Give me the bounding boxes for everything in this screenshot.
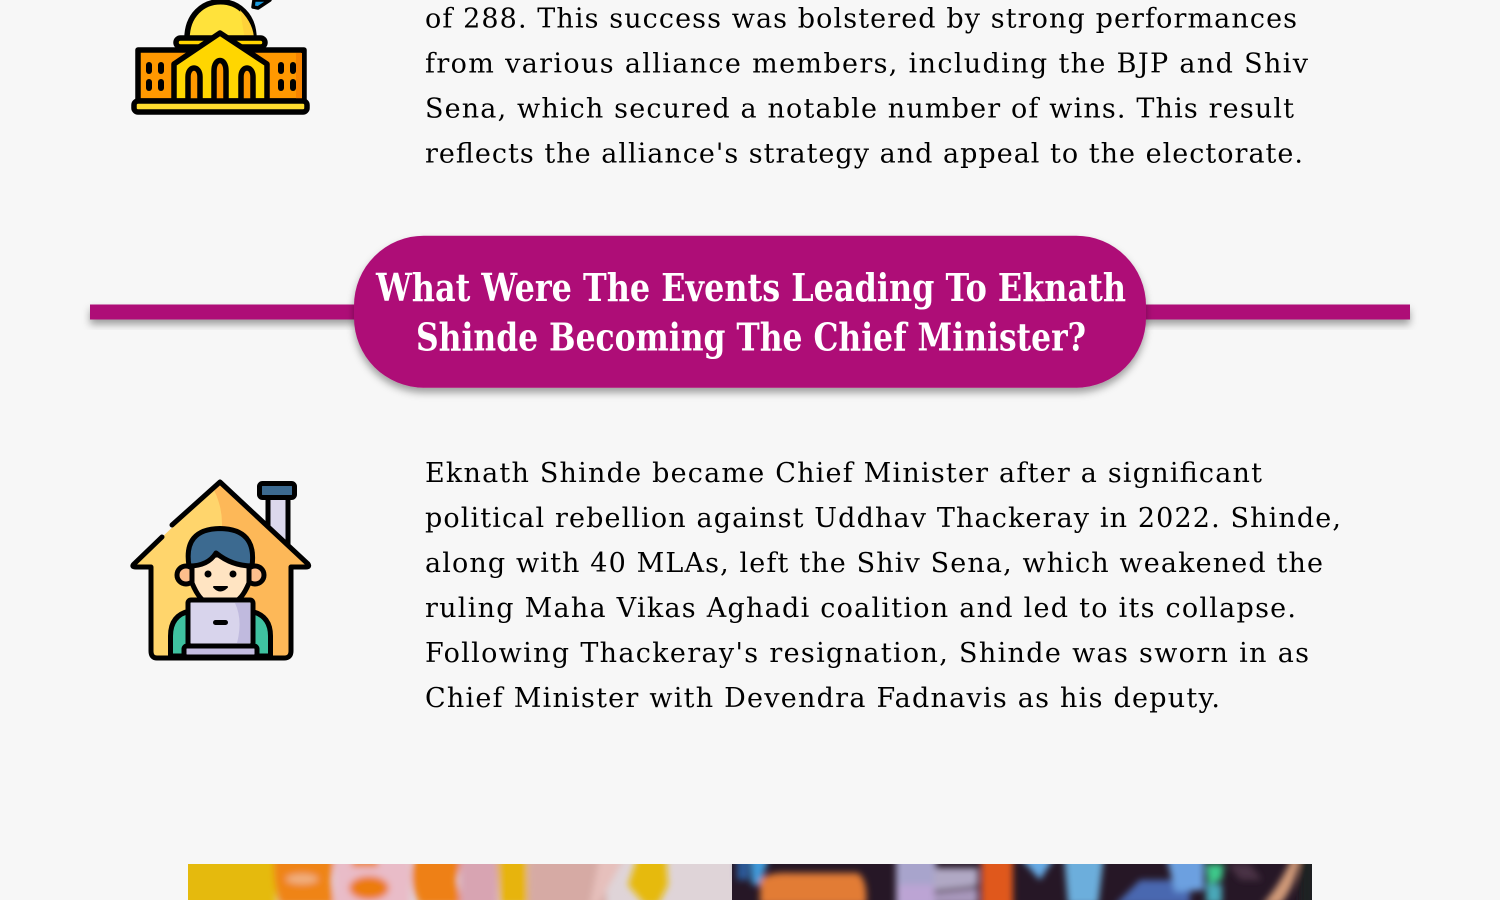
text block: rebellion account: ruling Maha Vikas Aghadi coalition and led to its collapse. bbox=[425, 593, 1296, 624]
icon: person working at home bbox=[133, 482, 309, 658]
heading: What Were The Events Leading To Eknath bbox=[375, 265, 1126, 310]
text block: election result bbox=[425, 3, 1309, 169]
text block: election result: reflects the alliance's strategy and appeal to the electorate. bbox=[425, 138, 1303, 169]
text block: election result: from various alliance members, including the BJP and Shiv bbox=[425, 48, 1309, 79]
heading banner bbox=[90, 236, 1410, 388]
heading bbox=[375, 265, 1126, 360]
text block: election result: Sena, which secured a notable number of wins. This result bbox=[425, 93, 1294, 124]
text block: rebellion account bbox=[425, 458, 1341, 714]
text block: rebellion account: Following Thackeray's resignation, Shinde was sworn in as bbox=[425, 638, 1309, 669]
photo: cropped top edge bbox=[188, 864, 1312, 900]
text block: rebellion account: along with 40 MLAs, left the Shiv Sena, which weakened the bbox=[425, 548, 1323, 579]
heading: Shinde Becoming The Chief Minister? bbox=[416, 314, 1086, 360]
text block: rebellion account: Chief Minister with Devendra Fadnavis as his deputy. bbox=[425, 683, 1220, 714]
icon: government building bbox=[134, 0, 307, 112]
text block: rebellion account: political rebellion against Uddhav Thackeray in 2022. Shinde, bbox=[425, 503, 1341, 534]
text block: rebellion account: Eknath Shinde became Chief Minister after a significant bbox=[425, 458, 1262, 489]
text block: election result: of 288. This success was bolstered by strong performances bbox=[425, 3, 1297, 34]
